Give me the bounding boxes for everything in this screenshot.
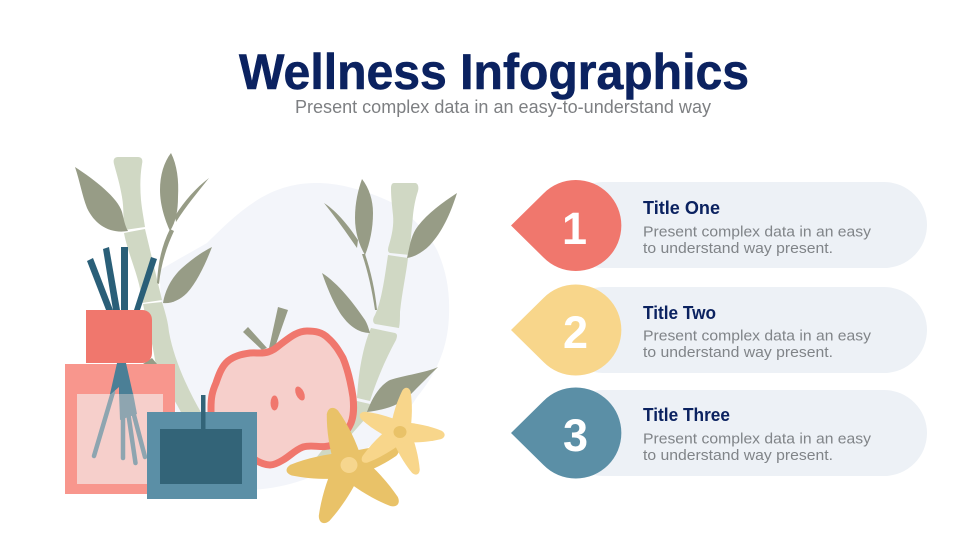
apple stems [243, 307, 288, 350]
bottle body [65, 364, 175, 494]
description: Present complex data in an easy [643, 224, 872, 240]
title: Wellness Infographics [239, 44, 749, 100]
number 2: 2 [563, 307, 588, 358]
heading: Title Two [643, 303, 716, 323]
number 3: 3 [563, 410, 588, 461]
heading: Title Three [643, 405, 730, 425]
card: Title Three [511, 388, 927, 478]
reed diffuser bottle [65, 247, 175, 494]
bottle cap [86, 310, 152, 363]
heading: Title One [643, 198, 720, 218]
pin marker: red [511, 180, 621, 271]
reeds in bottle [94, 392, 145, 463]
left bamboo [114, 157, 202, 414]
background blob [160, 183, 449, 490]
pin marker: yellow [511, 285, 621, 376]
blue candle box [147, 395, 257, 499]
pin marker: blue [511, 388, 621, 478]
description: to understand way present. [643, 241, 833, 257]
description: Present complex data in an easy [643, 432, 872, 448]
subtitle: Present complex data in an easy-to-understand way [295, 97, 711, 117]
reed fill below neck [119, 393, 137, 420]
description: Present complex data in an easy [643, 328, 872, 344]
left bamboo leaves [75, 153, 212, 364]
illustration: wellness still life [65, 153, 457, 529]
card: Title One [511, 180, 927, 271]
small flower [356, 386, 445, 478]
right bamboo leaves [322, 179, 457, 412]
number 1: 1 [562, 203, 587, 254]
apple [211, 331, 354, 465]
right bamboo [316, 183, 418, 458]
card: Title Two [511, 285, 927, 376]
description: to understand way present. [643, 345, 833, 361]
reed sticks [87, 247, 157, 310]
description: to understand way present. [643, 448, 833, 464]
card background [560, 182, 927, 268]
card background [560, 390, 927, 476]
apple seeds [270, 385, 307, 410]
bottle label [77, 394, 163, 484]
reed neck [110, 363, 133, 394]
large flower [285, 404, 407, 529]
card background [560, 287, 927, 373]
